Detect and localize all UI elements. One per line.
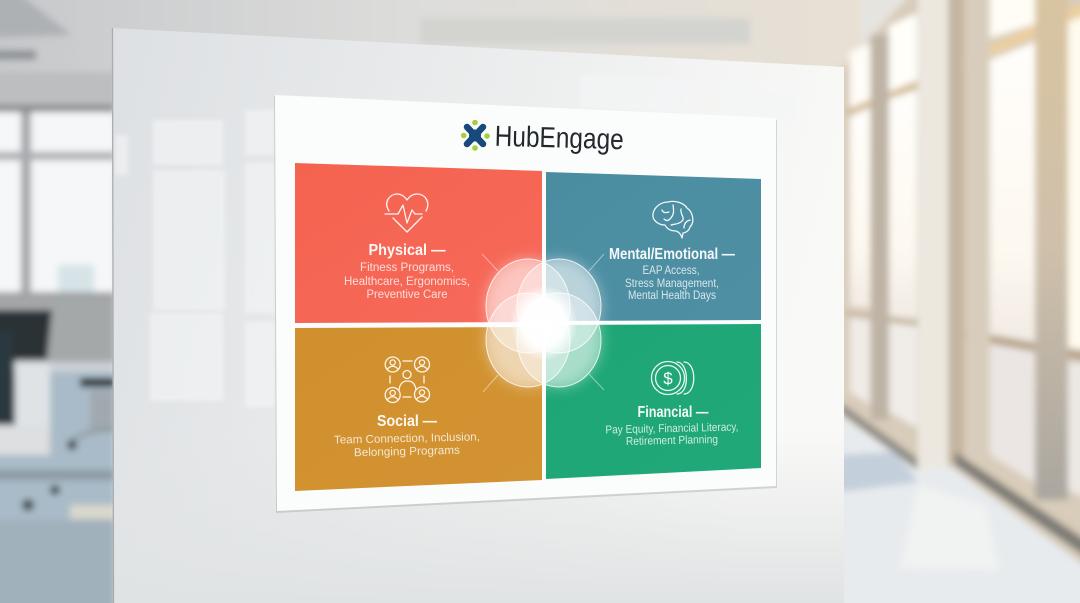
text: social: Belonging Programs [354,445,460,459]
text: social: Team Connection, Inclusion, [334,431,480,447]
icon: brain [653,201,693,238]
glass board [112,28,844,603]
icon: connected people [385,357,430,402]
icon: coins: $ [663,369,673,388]
icon: heart with pulse [385,194,428,232]
panel: financial [546,324,761,479]
venn glowing core [510,285,578,361]
text: social [334,413,480,459]
venn circle outlines [486,259,601,387]
text: physical: Fitness Programs, [360,262,454,274]
connector lines [482,254,604,392]
text: financial [605,404,739,448]
windows right [840,0,1080,603]
logo mark [461,120,490,151]
window reflections on the board [115,75,800,407]
venn outer glow [486,259,601,387]
icon: coins [652,362,694,394]
venn circles [486,259,601,387]
text: physical: Physical — [368,242,446,259]
venn diagram of four overlapping circles [482,254,604,392]
logo: HubEngage [461,120,624,156]
text: mental/emotional [609,246,735,302]
text: physical [344,242,470,301]
text: mental/emotional: Mental/Emotional — [609,246,735,263]
logo wordmark: HubEngage [494,121,624,156]
panel: social [295,327,542,491]
text: physical: Preventive Care [366,289,448,301]
text: mental/emotional: Mental Health Days [628,290,716,302]
poster sheet [275,95,776,511]
panel: physical [295,163,542,323]
text: financial: Financial — [638,404,708,421]
text: physical: Healthcare, Ergonomics, [344,276,470,288]
text: financial: Retirement Planning [626,434,718,448]
poster sheet shadow [274,96,777,513]
text: mental/emotional: EAP Access, [642,265,700,277]
text: mental/emotional: Stress Management, [625,278,719,290]
panel: mental/emotional [546,172,761,321]
text: social: Social — [377,413,437,430]
text: financial: Pay Equity, Financial Literacy, [605,421,739,437]
